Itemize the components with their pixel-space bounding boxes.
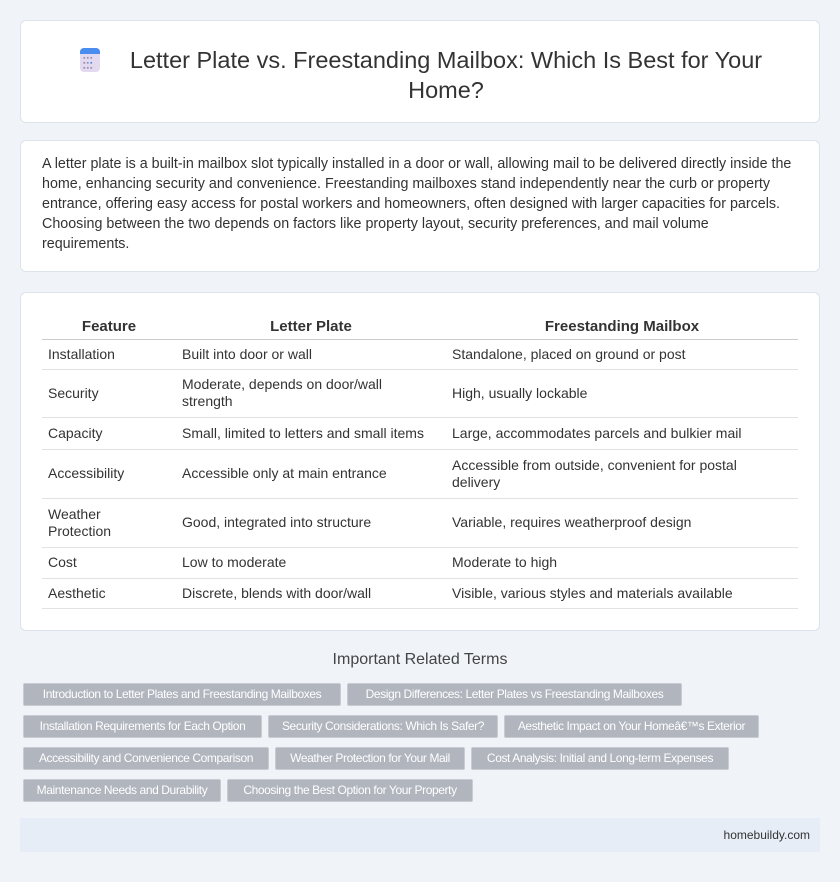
comparison table panel: Built into door or wall: [182, 346, 312, 362]
comparison table panel: Good, integrated into structure: [182, 514, 371, 530]
icon: calendar: ▪▪▪: [83, 65, 93, 72]
comparison table panel: Installation: [48, 346, 115, 362]
comparison table panel: Letter Plate: [270, 318, 352, 335]
footer: [20, 818, 820, 852]
related terms heading: Important Related Terms: [333, 651, 507, 668]
comparison table panel: Weather Protection: [48, 506, 111, 538]
related terms tags: Weather Protection for Your Mail: [290, 751, 450, 765]
header card: [20, 20, 820, 123]
comparison table panel: Capacity: [48, 424, 102, 440]
related terms tags: Cost Analysis: Initial and Long-term Expenses: [487, 751, 713, 765]
related terms tags: Security Considerations: Which Is Safer?: [282, 719, 484, 733]
comparison table panel: Visible, various styles and materials available: [452, 584, 733, 600]
related terms tags: Introduction to Letter Plates and Freestanding Mailboxes: [43, 687, 321, 701]
comparison table panel: Feature: [82, 318, 136, 335]
related terms tags: Maintenance Needs and Durability: [37, 783, 207, 797]
comparison table panel: Accessible from outside, convenient for postal delivery: [452, 456, 737, 490]
icon: calendar: ▪▪▪: [83, 60, 93, 67]
intro text: A letter plate is a built-in mailbox slot typically installed in a door or wall, allowing mail to be delivered directly inside the home, enhancing security and convenience. Freestanding mailboxes stand independently near the curb or property entrance, offering easy access for postal workers and homeowners, often designed with larger capacities for parcels. Choosing between the two depends on factors like property layout, security preferences, and mail volume requirements.: [42, 156, 791, 252]
icon: calendar: [80, 48, 100, 72]
comparison table panel: Security: [48, 384, 99, 400]
comparison table panel: Large, accommodates parcels and bulkier mail: [452, 424, 741, 440]
related terms tags: Aesthetic Impact on Your Homeâ€™s Exterior: [518, 719, 745, 733]
related terms tags: Design Differences: Letter Plates vs Freestanding Mailboxes: [366, 687, 663, 701]
comparison table panel: [20, 292, 820, 631]
related terms tags: Installation Requirements for Each Option: [40, 719, 245, 733]
title: Letter Plate vs. Freestanding Mailbox: Which Is Best for Your Home?: [130, 47, 762, 103]
comparison table panel: Moderate, depends on door/wall strength: [182, 376, 382, 409]
comparison table panel: Accessibility: [48, 465, 124, 481]
comparison table panel: Freestanding Mailbox: [545, 318, 699, 335]
comparison table panel: Cost: [48, 554, 77, 570]
comparison table panel: Aesthetic: [48, 584, 106, 600]
related terms tags: Accessibility and Convenience Comparison: [39, 751, 253, 765]
intro text: [20, 140, 820, 272]
comparison table panel: Moderate to high: [452, 554, 557, 570]
related terms tags: Choosing the Best Option for Your Property: [243, 783, 457, 797]
comparison table panel: Accessible only at main entrance: [182, 465, 387, 481]
comparison table panel: Discrete, blends with door/wall: [182, 584, 371, 600]
comparison table panel: Low to moderate: [182, 554, 286, 570]
comparison table panel: Variable, requires weatherproof design: [452, 514, 691, 530]
comparison table panel: Small, limited to letters and small items: [182, 424, 424, 440]
icon: calendar: ▪▪▪: [83, 55, 93, 62]
comparison table panel: High, usually lockable: [452, 384, 587, 400]
comparison table panel: Standalone, placed on ground or post: [452, 346, 686, 362]
footer: homebuildy.com: [724, 828, 810, 842]
